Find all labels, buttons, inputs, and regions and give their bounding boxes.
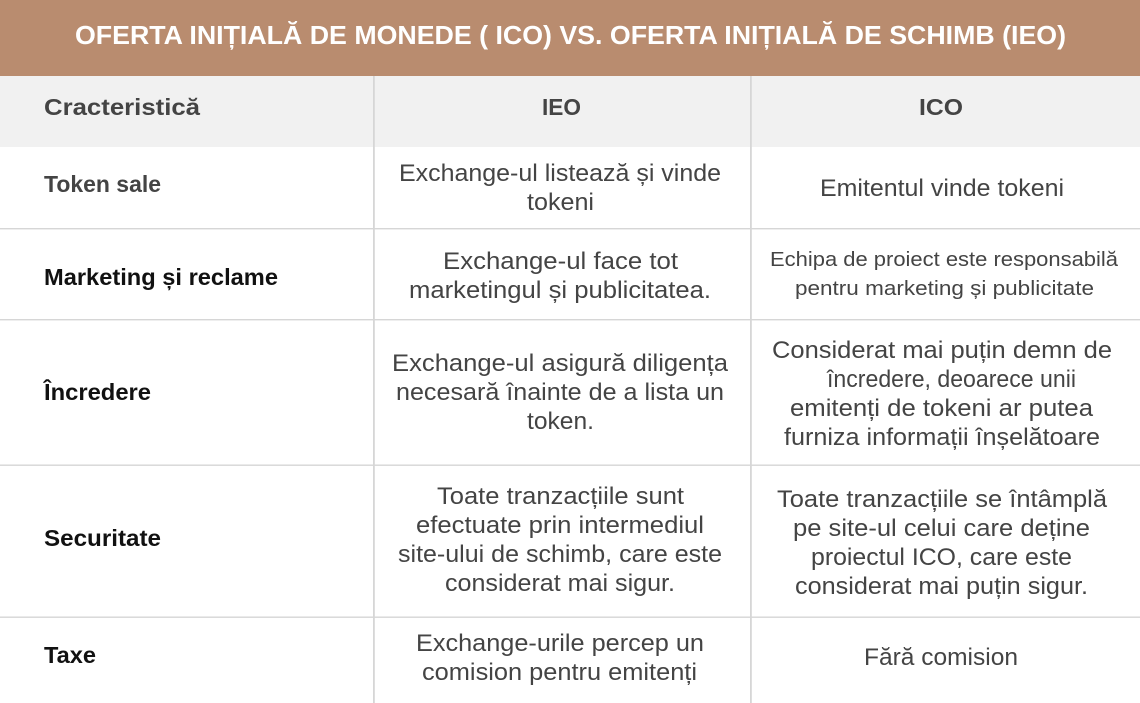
row: Taxe bbox=[44, 630, 1018, 686]
row: Încredere: Încredere bbox=[43, 378, 151, 405]
table header row bbox=[0, 76, 1140, 147]
row: Încredere: token. bbox=[527, 408, 594, 435]
row: Securitate: considerat mai puțin sigur. bbox=[795, 573, 1088, 600]
row: Marketing și reclame: Exchange-ul face tot bbox=[443, 248, 678, 275]
row: Securitate: Toate tranzacțiile sunt bbox=[437, 483, 684, 510]
row: Încredere bbox=[43, 337, 1112, 451]
row: Securitate: proiectul ICO, care este bbox=[811, 544, 1072, 571]
row: Securitate: Securitate bbox=[44, 525, 161, 551]
table header row: ICO bbox=[919, 94, 963, 120]
row: Încredere: necesară înainte de a lista un bbox=[396, 379, 724, 406]
row: Încredere: Considerat mai puțin demn de bbox=[772, 337, 1112, 364]
title banner bbox=[0, 0, 1140, 76]
row: Marketing și reclame: Echipa de proiect este responsabilă bbox=[770, 248, 1119, 271]
row: Taxe: comision pentru emitenți bbox=[422, 659, 697, 686]
row: Token sale bbox=[44, 160, 1064, 216]
row: Taxe: Fără comision bbox=[864, 644, 1018, 671]
row: Token sale: tokeni bbox=[527, 189, 594, 216]
row: Marketing și reclame: Marketing și reclame bbox=[44, 264, 278, 291]
row: Marketing și reclame bbox=[44, 248, 1119, 304]
row: Încredere: încredere, deoarece unii bbox=[826, 366, 1076, 393]
row: Marketing și reclame: pentru marketing și publicitate bbox=[795, 277, 1094, 300]
row: Încredere: Exchange-ul asigură diligența bbox=[392, 350, 729, 377]
row: Securitate: Toate tranzacțiile se întâmplă bbox=[777, 486, 1108, 513]
row: Securitate bbox=[44, 483, 1108, 600]
row: Încredere: emitenți de tokeni ar putea bbox=[790, 395, 1094, 422]
row: Token sale: Exchange-ul listează și vinde bbox=[399, 160, 721, 187]
row: Securitate: pe site-ul celui care deține bbox=[793, 515, 1090, 542]
table header row: Cracteristică bbox=[44, 94, 200, 120]
row: Token sale: Emitentul vinde tokeni bbox=[820, 175, 1064, 202]
row: Securitate: efectuate prin intermediul bbox=[416, 512, 704, 539]
row: Securitate: site-ului de schimb, care este bbox=[398, 541, 722, 568]
row: Marketing și reclame: marketingul și publicitatea. bbox=[409, 277, 711, 304]
title banner: OFERTA INIȚIALĂ DE MONEDE ( ICO) VS. OFERTA INIȚIALĂ DE SCHIMB (IEO) bbox=[75, 20, 1066, 50]
table header row: IEO bbox=[542, 94, 581, 120]
row: Token sale: Token sale bbox=[44, 171, 161, 197]
row: Securitate: considerat mai sigur. bbox=[445, 570, 675, 597]
row: Taxe: Taxe bbox=[44, 642, 96, 668]
row: Taxe: Exchange-urile percep un bbox=[416, 630, 704, 657]
row: Încredere: furniza informații înșelătoare bbox=[784, 424, 1100, 451]
